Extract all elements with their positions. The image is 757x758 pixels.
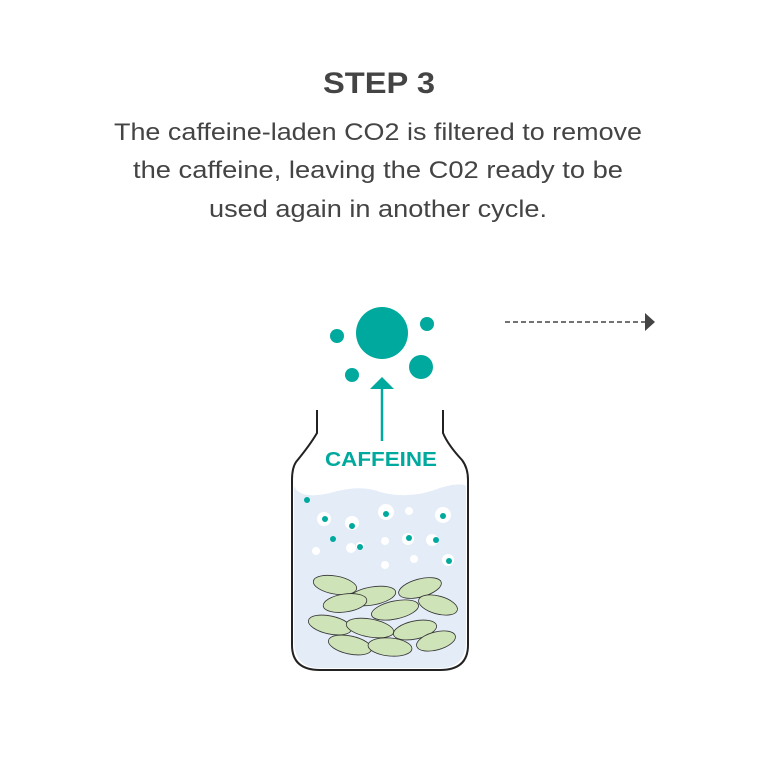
description text [114,119,642,223]
title: STEP 3 [323,67,435,100]
caffeine molecules [330,307,434,382]
bottle [292,410,468,670]
arrow up [370,377,394,441]
dashed arrow [505,313,655,331]
description text: used again in another cycle. [209,196,547,223]
description text: The caffeine-laden CO2 is filtered to remove [114,119,642,146]
caffeine label: CAFFEINE [325,449,437,471]
leaves [307,572,460,658]
bubbles [304,497,454,569]
description text: the caffeine, leaving the C02 ready to be [133,157,623,184]
